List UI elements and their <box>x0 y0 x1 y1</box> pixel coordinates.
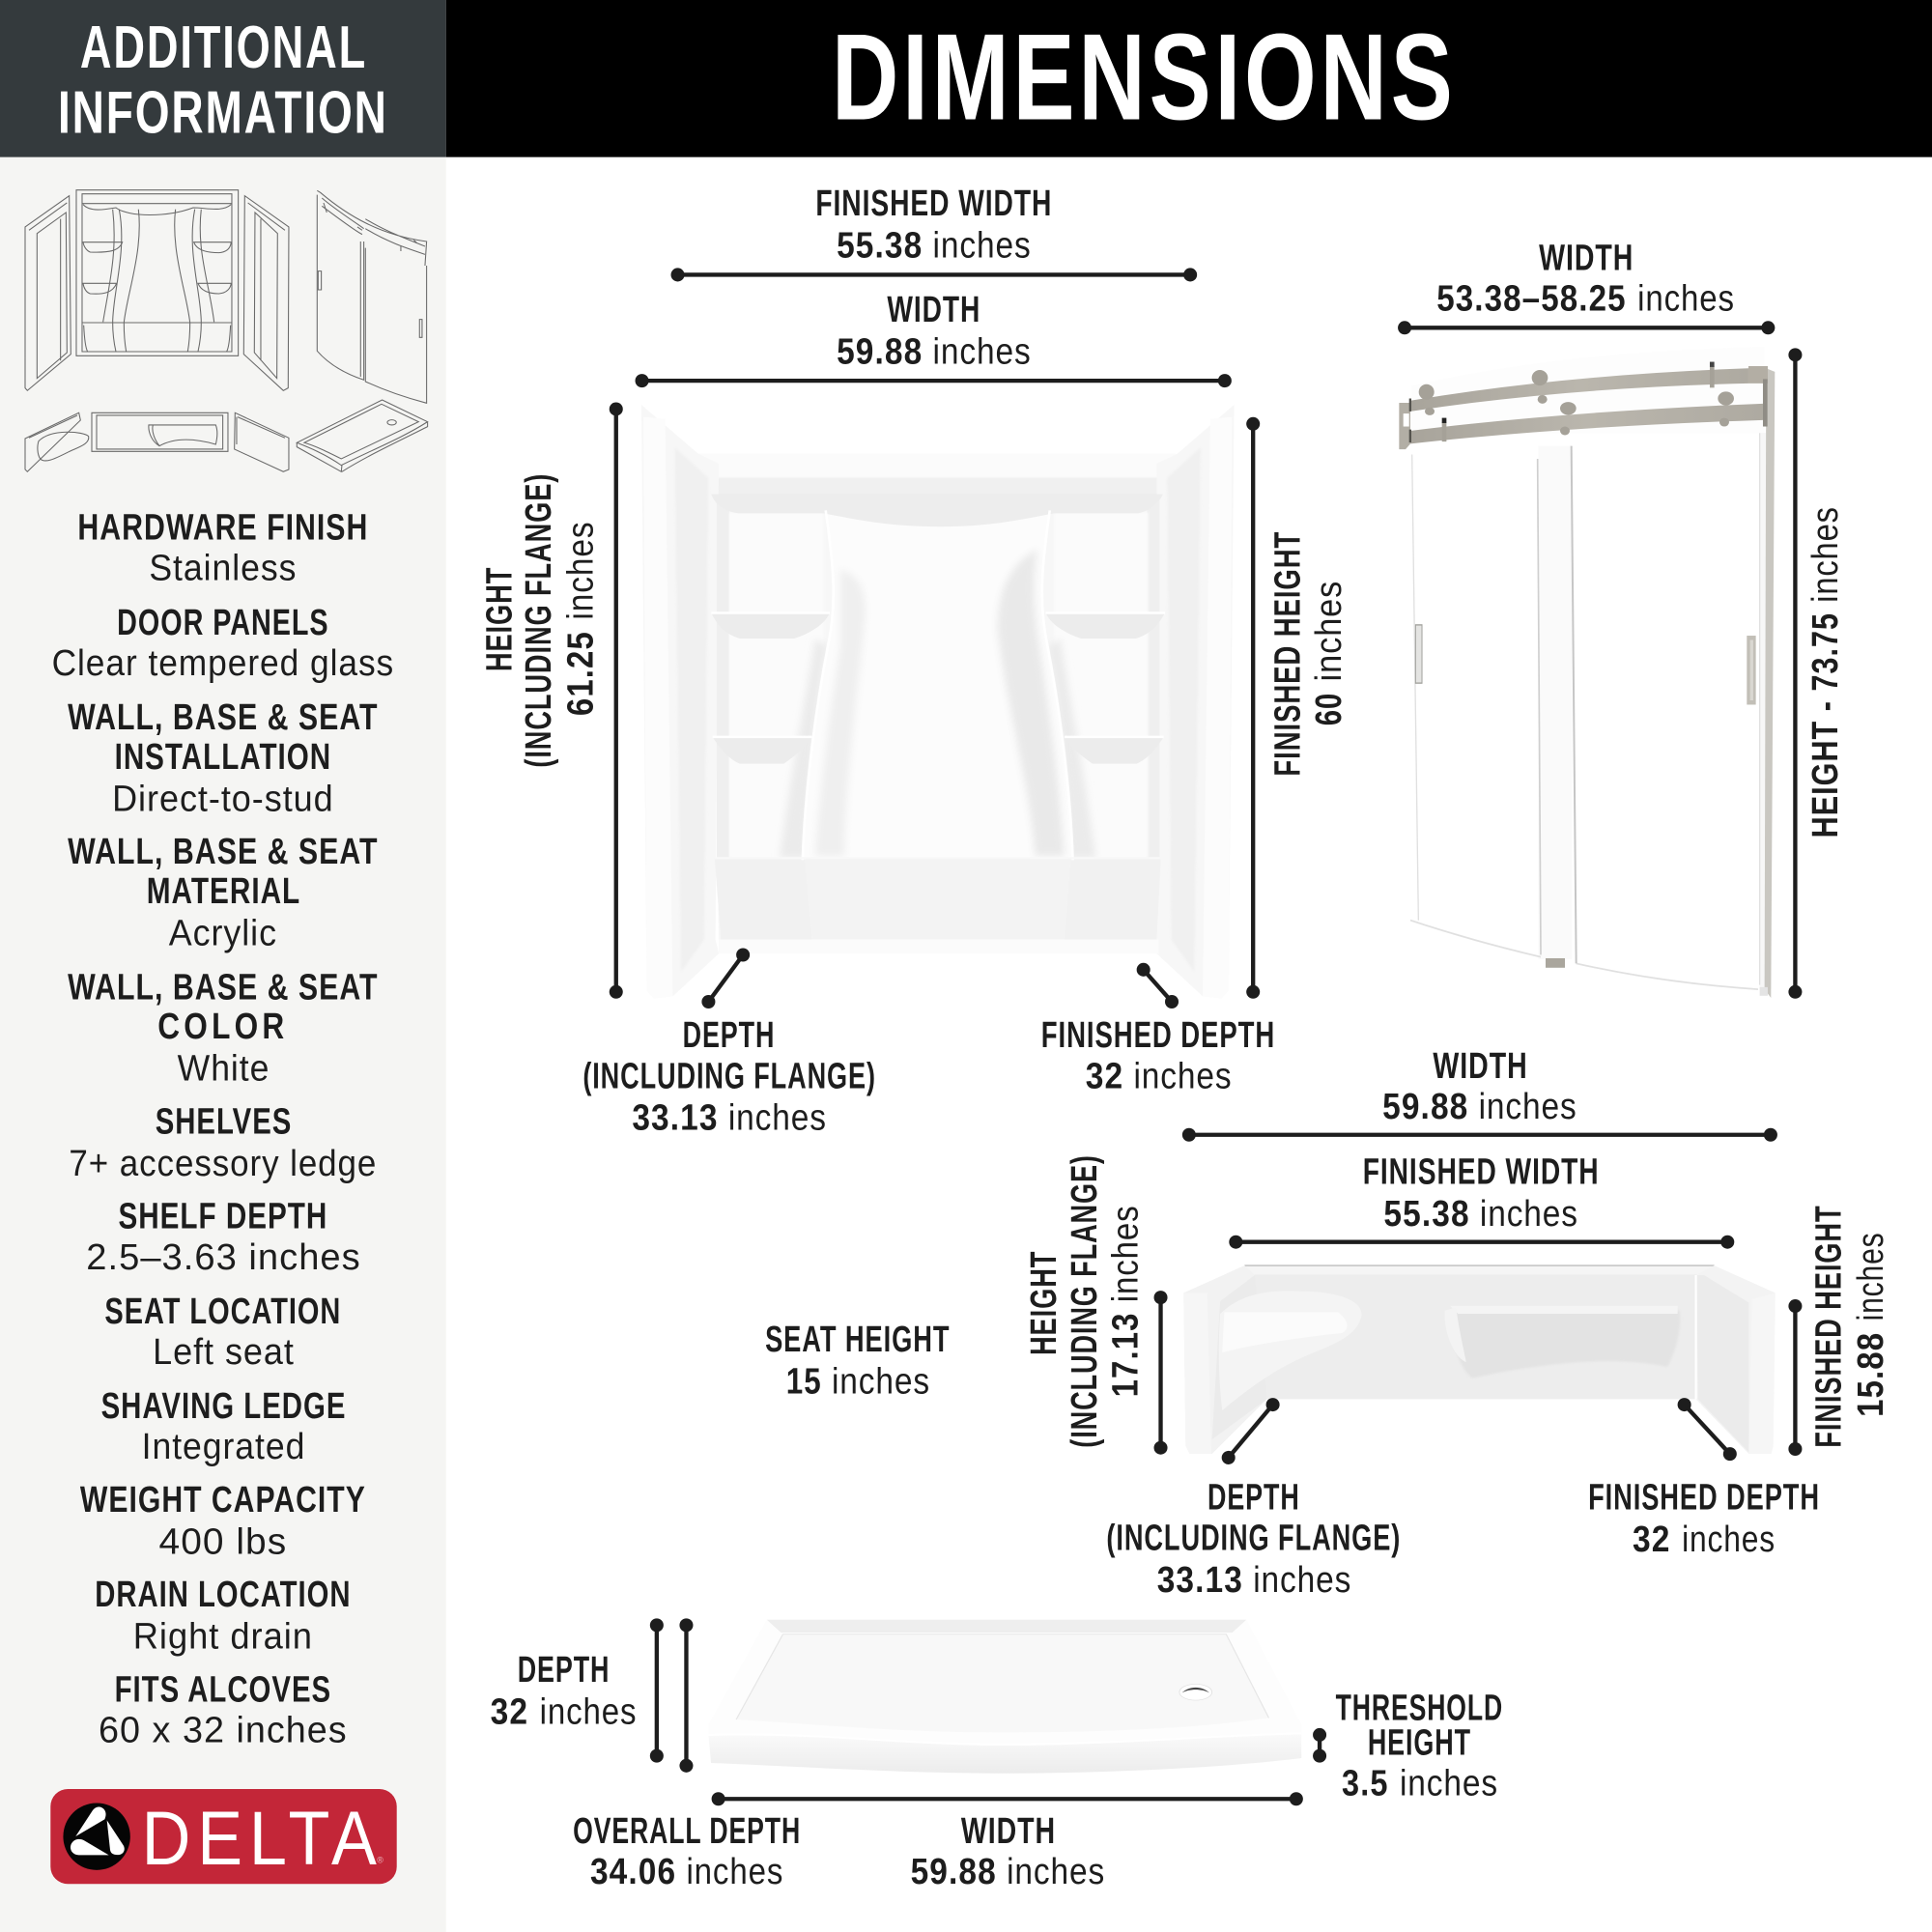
label: height including flange, wall: inches <box>560 522 602 620</box>
label: width, door: 53.38–58.25 <box>1436 277 1627 319</box>
label: width, seat wall: WIDTH <box>1433 1045 1528 1087</box>
label: width, seat wall <box>1382 1045 1577 1127</box>
spec list: SHELVES <box>156 1100 292 1142</box>
label: width, seat wall: inches <box>1479 1086 1577 1127</box>
spec list: MATERIAL <box>147 870 300 912</box>
label: height including flange, wall: HEIGHT <box>478 567 520 671</box>
label: depth, seat wall <box>1106 1476 1401 1601</box>
label: threshold height: 3.5 <box>1342 1762 1388 1804</box>
label: width, base <box>911 1810 1105 1892</box>
label: finished height, seat wall <box>1808 1205 1891 1448</box>
product photo: shower base <box>708 1620 1301 1774</box>
label: height including flange, seat wall <box>1023 1154 1146 1448</box>
spec list: HARDWARE FINISH <box>77 507 368 549</box>
label: finished width, seat wall: inches <box>1480 1193 1578 1235</box>
label: height including flange, wall <box>478 473 602 768</box>
label: height including flange, seat wall: inches <box>1104 1205 1146 1302</box>
label: finished width, wall: 55.38 <box>837 225 923 267</box>
label: finished width, wall <box>815 183 1052 267</box>
label: width, seat wall: 59.88 <box>1382 1086 1468 1127</box>
label: seat height: 15 <box>786 1361 822 1403</box>
spec list: Right drain <box>133 1616 313 1658</box>
label: overall depth: OVERALL DEPTH <box>573 1810 801 1852</box>
label: overall depth: inches <box>686 1851 783 1892</box>
label: height including flange, wall: 61.25 <box>560 631 602 716</box>
label: width, door <box>1436 237 1735 319</box>
spec list: SEAT LOCATION <box>104 1291 341 1332</box>
spec list: WALL, BASE & SEAT <box>68 696 379 738</box>
label: height including flange, wall: (INCLUDING FLANGE) <box>518 473 559 768</box>
product photo: sliding glass door <box>1399 347 1775 998</box>
spec list: Clear tempered glass <box>52 642 394 684</box>
spec list: DRAIN LOCATION <box>95 1574 352 1615</box>
spec list: Acrylic <box>169 912 277 953</box>
label: depth, wall: inches <box>728 1097 827 1139</box>
label: width, door: inches <box>1637 277 1735 319</box>
label: depth, seat wall: inches <box>1253 1559 1351 1601</box>
label: height, door: HEIGHT - 73.75 <box>1804 612 1846 838</box>
label: finished depth, seat wall: 32 <box>1633 1519 1671 1560</box>
label: depth, base <box>491 1649 637 1732</box>
spec list: 60 x 32 inches <box>99 1710 348 1751</box>
panel: title banner <box>446 0 1932 157</box>
label: finished width, seat wall: FINISHED WIDTH <box>1363 1151 1600 1193</box>
label: overall depth <box>573 1810 801 1892</box>
label: threshold height: THRESHOLD <box>1336 1688 1503 1729</box>
spec list: DOOR PANELS <box>117 602 329 643</box>
label: finished height, wall: inches <box>1308 581 1350 681</box>
spec list: SHELF DEPTH <box>118 1196 327 1237</box>
spec list: WALL, BASE & SEAT <box>68 966 379 1008</box>
panel: sidebar header <box>0 0 446 157</box>
spec list: 2.5–3.63 inches <box>86 1236 361 1278</box>
label: threshold height <box>1336 1688 1503 1804</box>
label: finished width, seat wall: 55.38 <box>1383 1193 1470 1235</box>
label: threshold height: inches <box>1400 1762 1498 1804</box>
panel: sidebar header: ADDITIONAL <box>80 14 367 81</box>
logo: Delta: DELTA <box>142 1795 384 1881</box>
label: finished width, seat wall <box>1363 1151 1600 1235</box>
dimension arrows <box>610 268 1802 1805</box>
label: depth, seat wall: (INCLUDING FLANGE) <box>1106 1518 1401 1559</box>
panel: sidebar <box>0 156 446 1932</box>
spec list: Integrated <box>142 1426 305 1467</box>
label: finished depth, wall: inches <box>1133 1055 1233 1096</box>
label: finished depth, wall <box>1041 1014 1275 1096</box>
label: width, door: WIDTH <box>1539 237 1634 278</box>
label: finished height, seat wall: FINISHED HEIGHT <box>1808 1205 1850 1448</box>
label: finished height, wall: 60 <box>1308 693 1350 725</box>
label: finished depth, seat wall <box>1588 1476 1820 1560</box>
spec list: COLOR <box>157 1006 288 1047</box>
label: finished width, wall: FINISHED WIDTH <box>815 183 1052 224</box>
label: depth, base: inches <box>540 1690 637 1732</box>
label: finished depth, wall: 32 <box>1086 1055 1123 1096</box>
spec list: WEIGHT CAPACITY <box>80 1479 366 1520</box>
panel: sidebar header: INFORMATION <box>58 79 388 147</box>
spec list: White <box>178 1048 270 1090</box>
line-art thumbnails of components <box>25 190 428 471</box>
label: finished height, seat wall: inches <box>1850 1233 1891 1321</box>
label: seat height: inches <box>832 1361 930 1403</box>
label: width, base: inches <box>1007 1851 1105 1892</box>
panel: title banner: DIMENSIONS <box>832 10 1457 147</box>
logo: Delta <box>50 1789 397 1884</box>
spec list <box>52 507 394 1751</box>
spec list: Direct-to-stud <box>112 778 334 819</box>
label: height, door: inches <box>1804 506 1846 603</box>
product photo: seat wall <box>1183 1265 1776 1454</box>
label: depth, wall <box>582 1014 876 1139</box>
label: threshold height: HEIGHT <box>1368 1721 1471 1763</box>
label: finished depth, seat wall: inches <box>1682 1519 1776 1560</box>
label: depth, base: DEPTH <box>518 1649 610 1690</box>
label: seat height: SEAT HEIGHT <box>765 1319 950 1360</box>
label: finished height, wall: FINISHED HEIGHT <box>1267 531 1309 777</box>
spec list: SHAVING LEDGE <box>101 1385 346 1427</box>
label: seat height <box>765 1319 950 1403</box>
label: depth, wall: DEPTH <box>683 1014 775 1056</box>
product photo: wall set <box>641 405 1235 998</box>
label: depth, seat wall: DEPTH <box>1208 1476 1300 1518</box>
spec list: 400 lbs <box>159 1520 287 1562</box>
label: width, wall: inches <box>933 330 1032 372</box>
label: depth, wall: (INCLUDING FLANGE) <box>582 1055 876 1096</box>
label: width, wall: WIDTH <box>887 289 980 330</box>
label: depth, base: 32 <box>491 1690 528 1732</box>
label: finished height, wall <box>1267 531 1350 777</box>
label: height including flange, seat wall: 17.13 <box>1104 1312 1146 1397</box>
label: height including flange, seat wall: HEIGHT <box>1023 1251 1065 1355</box>
logo: Delta: ® <box>377 1856 384 1865</box>
label: depth, wall: 33.13 <box>632 1097 719 1139</box>
label: finished height, seat wall: 15.88 <box>1850 1332 1891 1417</box>
label: width, wall: 59.88 <box>837 330 923 372</box>
label: finished depth, wall: FINISHED DEPTH <box>1041 1014 1275 1056</box>
spec list: 7+ accessory ledge <box>69 1143 377 1184</box>
spec list: Stainless <box>149 548 297 589</box>
label: height including flange, seat wall: (INCLUDING FLANGE) <box>1064 1154 1105 1448</box>
label: finished width, wall: inches <box>933 225 1032 267</box>
spec list: INSTALLATION <box>115 736 331 778</box>
label: width, base: WIDTH <box>961 1810 1056 1852</box>
spec list: Left seat <box>153 1331 295 1373</box>
label: depth, seat wall: 33.13 <box>1157 1559 1243 1601</box>
label: overall depth: 34.06 <box>590 1851 676 1892</box>
spec list: FITS ALCOVES <box>115 1668 331 1710</box>
label: width, base: 59.88 <box>911 1851 997 1892</box>
spec list: WALL, BASE & SEAT <box>68 831 379 872</box>
label: width, wall <box>837 289 1032 372</box>
label: finished depth, seat wall: FINISHED DEPTH <box>1588 1476 1820 1518</box>
